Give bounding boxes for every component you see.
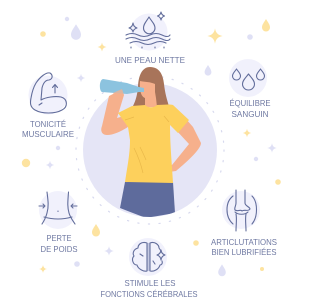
label: UNE PEAU NETTE bbox=[115, 55, 185, 65]
icon: flexed arm bbox=[28, 73, 68, 114]
item: tonicité musculaire: MUSCULAIRE bbox=[22, 129, 74, 139]
hair bbox=[133, 67, 169, 106]
label: ARTICLUTATIONS bbox=[211, 237, 277, 247]
item: tonicité musculaire bbox=[22, 73, 74, 139]
right arm on hip bbox=[160, 110, 201, 173]
item: une peau nette bbox=[115, 12, 185, 65]
label: TONICITÉ bbox=[30, 119, 66, 129]
item: stimule les fonctions cérébrales: FONCTIONS CÉRÉBRALES bbox=[100, 289, 198, 299]
item: perte de poids: DE POIDS bbox=[40, 244, 78, 254]
hand on bottle bbox=[113, 89, 124, 100]
item: stimule les fonctions cérébrales bbox=[100, 238, 198, 299]
icon: knee joint bbox=[222, 190, 260, 231]
icon: three drops bbox=[229, 59, 267, 97]
decorative sparkles, dots and drops bbox=[22, 17, 281, 276]
item: articulations bien lubrifiées bbox=[211, 190, 277, 257]
shirt folds bbox=[125, 116, 169, 173]
item: équilibre sanguin: SANGUIN bbox=[232, 109, 268, 119]
item: perte de poids bbox=[39, 191, 78, 254]
label: PERTE bbox=[46, 233, 72, 243]
dotted ring bbox=[76, 76, 224, 224]
icon: waist bbox=[39, 191, 77, 229]
neck and face bbox=[140, 81, 157, 107]
shorts bbox=[120, 182, 175, 218]
item: articulations bien lubrifiées: BIEN LUBRIFIÉES bbox=[212, 247, 277, 257]
icon: brain bbox=[129, 238, 167, 276]
bottle bbox=[100, 79, 144, 94]
item: équilibre sanguin bbox=[229, 59, 271, 119]
shirt bbox=[118, 105, 189, 183]
label: ÉQUILIBRE bbox=[230, 98, 271, 108]
back arm bbox=[101, 90, 128, 135]
woman drinking from a bottle bbox=[100, 67, 201, 218]
background circle bbox=[83, 83, 217, 217]
label: STIMULE LES bbox=[124, 278, 176, 288]
icon: water drop with waves bbox=[126, 12, 170, 50]
